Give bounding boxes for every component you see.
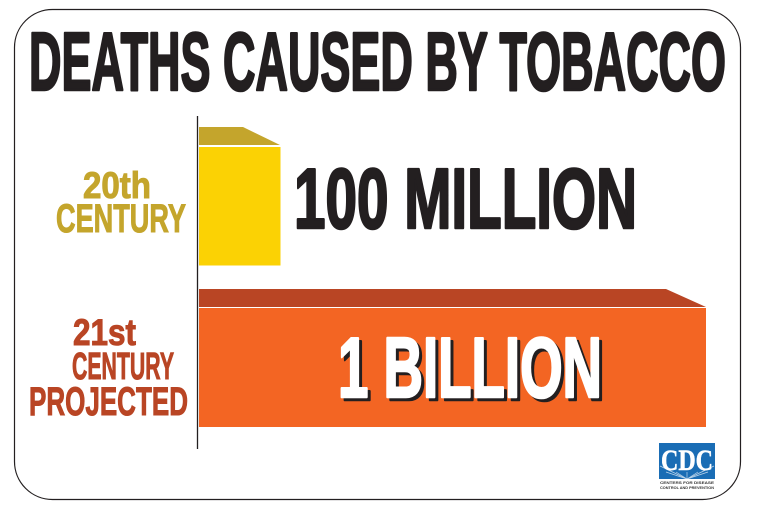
value: 1 billion with shadow (338, 321, 605, 419)
label: 20th century: 20th (83, 165, 151, 206)
label: 21st century projected (29, 312, 188, 424)
icon: CDC logo: CENTERS FOR DISEASE (660, 480, 714, 485)
icon: CDC logo: CONTROL AND PREVENTION (660, 485, 714, 490)
label: 21st century projected: 21st (73, 312, 136, 353)
chart axis (196, 116, 198, 449)
label: 21st century projected: PROJECTED (29, 380, 188, 424)
icon: CDC logo: CDC (661, 444, 713, 477)
label: 20th century: CENTURY (56, 197, 186, 241)
bar: 20th century (199, 127, 280, 266)
label: 20th century (56, 165, 186, 241)
value: 1 billion with shadow: 1 BILLION (341, 324, 605, 419)
value: 1 billion with shadow: 1 BILLION (338, 321, 602, 416)
label: 21st century projected: CENTURY (72, 346, 174, 388)
bar: 21st century projected (199, 289, 706, 427)
icon: CDC logo (659, 443, 715, 490)
